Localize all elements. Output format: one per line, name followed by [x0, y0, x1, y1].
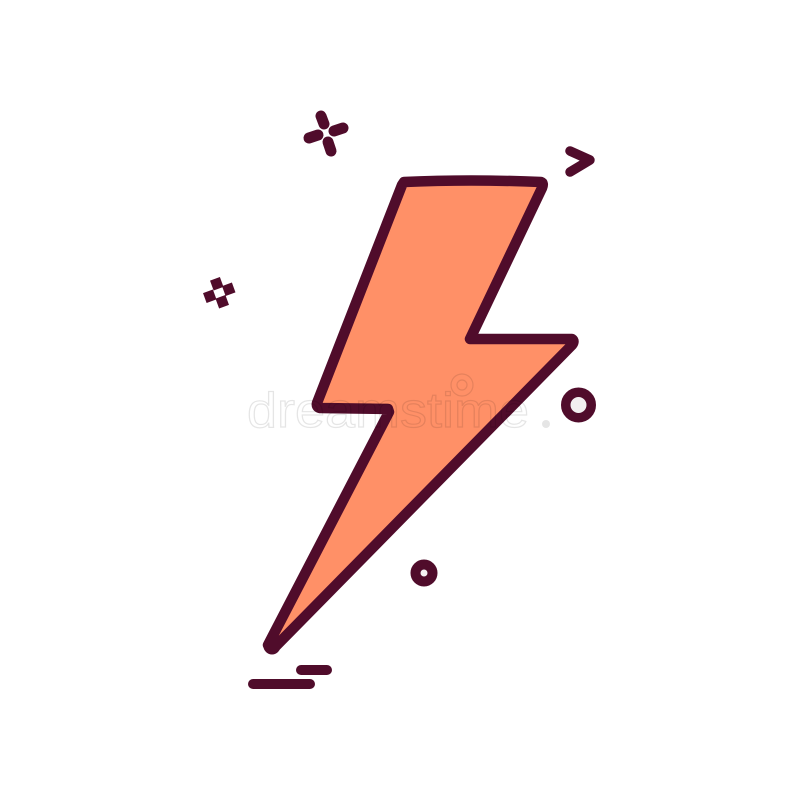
icon: motion dashes: [253, 670, 327, 684]
icon: checkered diamond sparkle: [203, 277, 235, 308]
watermark: dreamstime: [247, 384, 529, 438]
icon: lightning bolt: [264, 180, 574, 654]
icon: large ring: [566, 392, 591, 418]
icon: chevron: [570, 151, 590, 172]
icon: small ring: [416, 564, 432, 582]
icon: four-petal sparkle: [309, 116, 343, 151]
